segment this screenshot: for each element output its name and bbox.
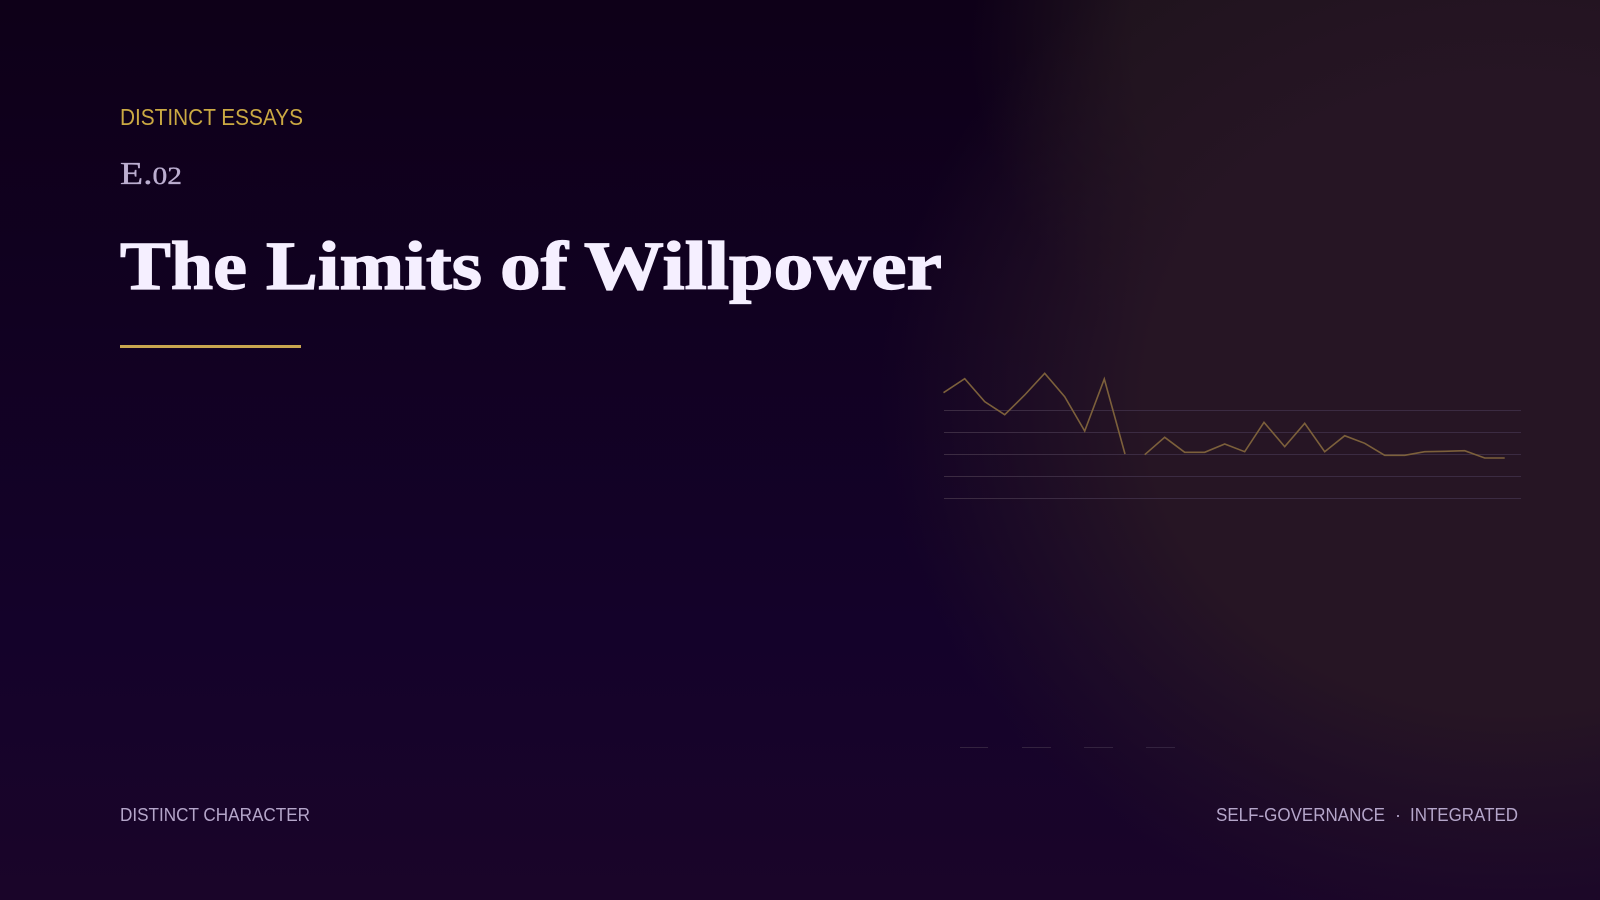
footer right label: INTEGRATED <box>1410 805 1518 825</box>
footer right label: · <box>1395 805 1401 825</box>
footer right label <box>1216 805 1518 825</box>
eyebrow: series name: DISTINCT ESSAYS <box>120 104 303 130</box>
title: The <box>120 228 247 304</box>
footer right label: SELF-GOVERNANCE <box>1216 805 1385 825</box>
line chart <box>944 373 1521 498</box>
chart grid lines <box>944 410 1521 498</box>
title: Willpower <box>584 228 942 304</box>
title <box>120 228 942 304</box>
footer left label: DISTINCT CHARACTER <box>120 805 310 825</box>
title: Limits <box>266 228 482 304</box>
title underline <box>120 345 301 348</box>
axis tick dashes <box>960 746 1175 748</box>
episode number: E.02 <box>120 155 182 191</box>
data line <box>944 373 1505 458</box>
title: of <box>500 228 569 304</box>
